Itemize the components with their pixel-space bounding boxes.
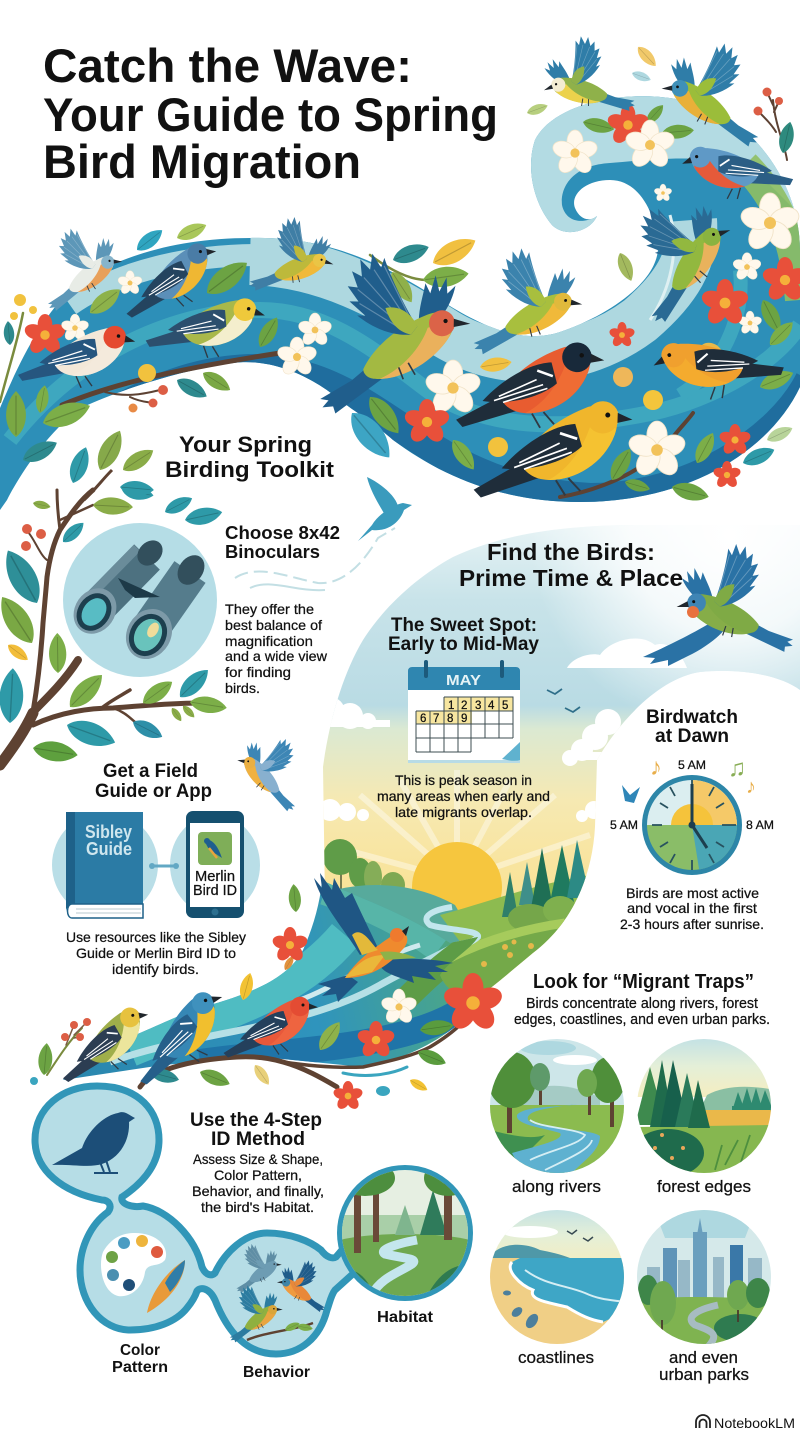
panel: four step id method chain: [35, 1086, 473, 1354]
text block: field guide heading: Get a Field: [103, 761, 198, 782]
text block: the sweet spot heading: Early to Mid-May: [388, 634, 539, 655]
bird: white and yellow perched: [144, 277, 268, 372]
bird: yellow flyer right: [472, 244, 589, 367]
labels: id steps: Pattern: [112, 1359, 168, 1376]
heading: your spring birding toolkit: Your Spring: [179, 432, 312, 457]
scene: urban parks: [637, 1210, 771, 1344]
bird: orange oriole: [648, 304, 786, 422]
text block: field guide description: Use resources like the Sibley: [66, 929, 246, 945]
text block: four step id method: [190, 1110, 324, 1215]
icon: clock with sunrise: ♪: [650, 754, 662, 781]
icon: paint palette and feather: [101, 1233, 185, 1313]
text block: four step id method: Color Pattern,: [214, 1167, 302, 1183]
labels: id steps: Behavior: [243, 1364, 310, 1381]
text block: four step id method: ID Method: [211, 1129, 305, 1150]
bird: red headed perched: [17, 311, 137, 399]
text block: peak season: late migrants overlap.: [395, 804, 532, 820]
icon: clock with sunrise: ♫: [728, 755, 746, 782]
text block: birdwatch at dawn: [646, 707, 738, 747]
conifers: [502, 840, 590, 917]
left tree branch: [0, 426, 228, 765]
notebooklm badge: NotebookLM: [714, 1415, 795, 1431]
text block: birdwatch at dawn: Birdwatch: [646, 707, 738, 728]
bird: large green flyer: [320, 253, 471, 416]
book: [66, 812, 143, 918]
text block: the sweet spot heading: The Sweet Spot:: [391, 615, 537, 636]
heading: find the birds: Prime Time & Place: [459, 565, 683, 591]
title: Catch the Wave:: [43, 39, 412, 92]
icon: may calendar: 6: [420, 713, 426, 725]
bird: blue perched: [119, 986, 241, 1086]
phone: Merlin: [195, 869, 235, 885]
text block: birds most active: 2-3 hours after sunrise.: [620, 916, 764, 932]
trees on left: [340, 874, 342, 889]
icon: may calendar: 8: [447, 713, 453, 725]
bird: chickadee at crest: [531, 27, 637, 137]
labels: migrant trap scenes: along rivers: [512, 1177, 601, 1196]
text block: peak season: This is peak season in: [395, 772, 532, 788]
panel: find the birds sky and landscape wave: [323, 525, 800, 989]
panel: main migration wave: [0, 90, 800, 510]
text block: field guide description: Guide or Merlin Bird ID to: [76, 945, 236, 961]
bird: green and red flyer: [661, 43, 758, 148]
icon: may calendar: 7: [433, 713, 439, 725]
labels: migrant trap scenes: coastlines: [518, 1348, 594, 1367]
book: Sibley: [85, 822, 132, 842]
title: [43, 39, 498, 188]
bird: yellow warbler: [117, 241, 224, 318]
text block: migrant traps: Birds concentrate along rivers, forest: [526, 996, 758, 1012]
text block: four step id method: Behavior, and finally,: [192, 1183, 324, 1199]
text block: choose binoculars: They offer the: [225, 601, 314, 617]
labels: migrant trap scenes: forest edges: [657, 1177, 751, 1196]
icon: small teal flying bird: [358, 477, 412, 541]
icon: may calendar: 3: [475, 700, 481, 712]
text block: choose binoculars: [225, 523, 340, 696]
phone: Bird ID: [193, 883, 237, 899]
flowing wave birds and foliage: [30, 873, 505, 1111]
labels: id steps: [112, 1309, 434, 1381]
birds on the main wave: [17, 27, 795, 503]
text block: field guide heading: [95, 761, 212, 802]
bird: green flyer in wave: [617, 185, 752, 326]
icon: clock with sunrise: [610, 754, 774, 875]
text block: birds most active: [620, 885, 764, 932]
text block: four step id method: Assess Size & Shape,: [193, 1151, 323, 1167]
text block: birds most active: and vocal in the first: [627, 900, 757, 916]
labels: migrant trap scenes: [512, 1177, 751, 1384]
icon: may calendar: 5: [502, 700, 508, 712]
dashed flight trail: [235, 528, 395, 590]
heading: your spring birding toolkit: Birding Toolkit: [165, 457, 335, 482]
icon: clock with sunrise: 5 AM: [678, 758, 706, 772]
bird: bluebird perched: [679, 122, 795, 215]
text block: field guide description: [66, 929, 246, 977]
panel: lower flowing wave: [63, 882, 478, 1080]
heading: find the birds: Find the Birds:: [487, 539, 655, 565]
icon: habitat forest: [335, 1160, 473, 1301]
icon: may calendar: [408, 660, 520, 763]
text block: four step id method: Use the 4-Step: [190, 1110, 322, 1131]
bright hill: [440, 921, 564, 989]
text block: choose binoculars: Binoculars: [225, 542, 320, 562]
text block: peak season: [377, 772, 550, 820]
icon: may calendar: 9: [461, 713, 467, 725]
book: Guide: [86, 839, 132, 859]
clouds: [315, 638, 687, 822]
icon: may calendar: 2: [461, 700, 467, 712]
river: [423, 904, 482, 946]
text block: choose binoculars: Choose 8x42: [225, 523, 340, 543]
bird: yellow oriole: [473, 397, 633, 503]
icon: clock with sunrise: 8 AM: [746, 818, 774, 832]
icon: may calendar: 4: [488, 700, 495, 712]
sun rays: [328, 770, 590, 880]
text block: choose binoculars: for finding: [225, 664, 291, 680]
scene: along rivers: [490, 1039, 624, 1173]
hills: [340, 885, 460, 943]
icon: flying bird near find the birds: [643, 537, 795, 672]
text block: migrant traps: Look for “Migrant Traps”: [533, 971, 754, 993]
labels: migrant trap scenes: and even: [669, 1348, 738, 1367]
title: Bird Migration: [43, 135, 361, 188]
icon: binoculars in circle: [63, 523, 217, 677]
icon: clock with sunrise: 5 AM: [610, 818, 638, 832]
heading: find the birds: [459, 539, 683, 591]
small distant birds: [547, 689, 580, 712]
branches and leaves on the main wave: [0, 43, 798, 505]
icon: clock with sunrise: ♪: [746, 776, 756, 798]
bird: baltimore oriole: [456, 334, 605, 437]
leaves above toolkit heading: [92, 426, 128, 474]
icon: bird behaviors: [230, 1244, 325, 1342]
icon: flying bird near field guide: [230, 731, 307, 813]
bird: yellow perched: [52, 1004, 158, 1083]
text block: choose binoculars: and a wide view: [225, 648, 328, 664]
text block: choose binoculars: magnification: [225, 633, 313, 649]
bird: large orange flyer over the flow: [314, 873, 453, 1002]
bird: yellow flyer: [248, 210, 343, 309]
phone: [186, 811, 244, 918]
title: Your Guide to Spring: [43, 88, 498, 141]
bird: pale flyer: [45, 227, 124, 311]
text block: migrant traps: [514, 971, 770, 1028]
text block: field guide heading: Guide or App: [95, 781, 212, 802]
text block: choose binoculars: birds.: [225, 680, 260, 696]
text block: four step id method: the bird's Habitat.: [201, 1199, 314, 1215]
text block: peak season: many areas when early and: [377, 788, 550, 804]
icon: bird silhouette size and shape: [52, 1112, 135, 1173]
labels: migrant trap scenes: urban parks: [659, 1365, 749, 1384]
scene: forest edges: [638, 1039, 771, 1173]
icon: field guide book and app: [52, 811, 260, 918]
flowers on the main wave: [10, 88, 800, 489]
heading: your spring birding toolkit: [165, 432, 335, 482]
icon: may calendar: 1: [448, 700, 454, 712]
icon: may calendar: MAY: [446, 673, 481, 689]
text block: choose binoculars: best balance of: [225, 617, 322, 633]
text block: birds most active: Birds are most active: [626, 885, 759, 901]
scene: coastlines: [490, 1210, 624, 1344]
text block: the sweet spot heading: [388, 615, 539, 655]
text block: birdwatch at dawn: at Dawn: [655, 726, 729, 747]
text block: field guide description: identify birds.: [112, 961, 199, 977]
text block: migrant traps: edges, coastlines, and even urban parks.: [514, 1012, 770, 1028]
labels: id steps: Habitat: [377, 1309, 434, 1326]
labels: id steps: Color: [120, 1342, 160, 1359]
bird: red perched: [224, 997, 318, 1058]
